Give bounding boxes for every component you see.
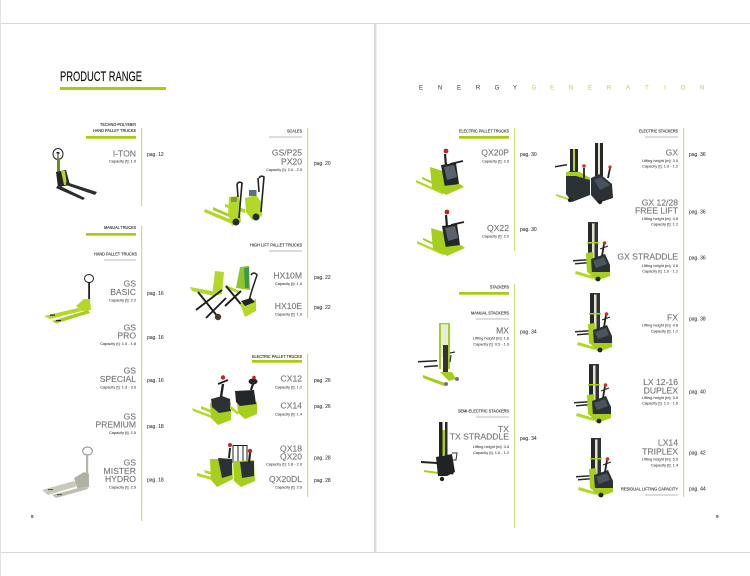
- page number 8: 8: [31, 514, 34, 519]
- icon: QX22 truck: [417, 210, 465, 256]
- product: FX: pag. 38: [689, 317, 706, 323]
- icon: FX stacker: [575, 293, 612, 352]
- product: QX18 QX20: Capacity [t]: 1.8 - 2.0: [266, 462, 303, 467]
- icon: QX pallet trucks: [197, 443, 255, 487]
- product: MX: [473, 325, 537, 346]
- product: CX12: [275, 374, 331, 390]
- product: LX14 triplex: TRIPLEX: [642, 446, 678, 456]
- right page: [416, 85, 719, 528]
- product: CX14: Capacity [t]: 1.4: [275, 411, 303, 416]
- section: residual lifting capacity: RESIDUAL LIFTING CAPACITY: [621, 487, 679, 492]
- section: residual lifting capacity: [621, 487, 706, 496]
- subheading: hand pallet trucks: HAND PALLET TRUCKS: [94, 252, 137, 257]
- subheading: manual stackers: MANUAL STACKERS: [471, 310, 509, 315]
- product: GX: Capacity [t]: 1.0 - 1.2: [642, 164, 678, 169]
- product: LX14 triplex: pag. 42: [689, 451, 706, 457]
- subheading: semi-electric stackers: SEMI-ELECTRIC STACKERS: [458, 409, 509, 414]
- icon: CX pallet trucks: [192, 375, 258, 425]
- icon: TX stacker: [421, 422, 457, 481]
- product: TX / TX straddle: Capacity [t]: 1.0 - 1.2: [473, 450, 509, 455]
- icon: I-TON pallet truck: [53, 148, 97, 200]
- section: electric pallet trucks: ELECTRIC PALLET TRUCKS: [252, 354, 302, 359]
- product: GX straddle: Capacity [t]: 1.0 - 1.2: [642, 269, 678, 274]
- product: LX 12-16 duplex: pag. 40: [689, 389, 706, 395]
- product: GS mister hydro: HYDRO: [105, 474, 136, 484]
- product: GS mister hydro: GS: [124, 458, 136, 468]
- heading: energy generation: [419, 85, 704, 91]
- section: techno-polymer hand pallet trucks: [86, 122, 164, 206]
- product: GS basic: pag. 16: [147, 291, 164, 297]
- heading: energy generation: ENERGY: [419, 85, 517, 91]
- product: GS special: pag. 16: [147, 378, 164, 384]
- section: scales: Capacity [t]: 2.0 - 2.5: [266, 167, 302, 172]
- section: techno-polymer hand pallet trucks: pag. 12: [147, 152, 164, 158]
- section: high lift pallet trucks: HIGH LIFT PALLET TRUCKS: [250, 243, 302, 248]
- product: QX20DL: Capacity [t]: 2.0: [275, 485, 303, 490]
- product: GS mister hydro: Capacity [t]: 2.5: [109, 484, 136, 489]
- product: FX: Capacity [t]: 1.2: [651, 328, 678, 333]
- product: GS mister hydro: pag. 18: [147, 478, 164, 484]
- product: GX: Lifting height [m]: 3.5: [642, 158, 678, 163]
- product: HX10E: Capacity [t]: 1.0: [275, 312, 303, 317]
- product: GS mister hydro: MISTER: [104, 466, 136, 476]
- section: techno-polymer hand pallet trucks: Capacity [t]: 1.0: [109, 158, 137, 164]
- product: GX 12/28 free lift: GX 12/28: [642, 197, 678, 207]
- product: GS special: SPECIAL: [100, 374, 136, 384]
- product: GS special: GS: [124, 366, 136, 376]
- product: GS pro: PRO: [117, 331, 136, 341]
- section: high lift pallet trucks: [250, 243, 302, 252]
- product: TX / TX straddle: TX STRADDLE: [450, 432, 509, 442]
- product: QX20DL: [269, 474, 331, 490]
- icon: GX straddle stacker: [573, 222, 610, 281]
- product: GS premium: GS: [124, 411, 136, 421]
- product: CX12: pag. 26: [314, 378, 331, 384]
- product: HX10M: HX10M: [273, 271, 302, 281]
- product: QX18 QX20: QX20: [280, 451, 302, 461]
- icon: scale pallet trucks: [204, 176, 264, 226]
- product: QX20P: Capacity [t]: 2.0: [482, 158, 510, 163]
- product: GS special: [100, 366, 164, 389]
- product: TX / TX straddle: Lifting height [m]: 3.5: [473, 444, 509, 449]
- product: LX14 triplex: Lifting height [m]: 5.0: [642, 457, 679, 462]
- product: CX14: CX14: [280, 401, 302, 411]
- product: QX20P: QX20P: [481, 148, 509, 158]
- heading: energy generation: GENERATION: [532, 85, 704, 91]
- icon: QX20P truck: [416, 149, 464, 195]
- product: GX 12/28 free lift: [635, 197, 706, 227]
- product: LX 12-16 duplex: Lifting height [m]: 3.5: [642, 395, 678, 400]
- product: GX straddle: Lifting height [m]: 3.8: [642, 263, 678, 268]
- product: QX18 QX20: QX18: [280, 443, 302, 453]
- product: CX12: Capacity [t]: 1.2: [275, 385, 302, 390]
- product: HX10M: [273, 271, 331, 286]
- product: GS basic: [109, 279, 164, 303]
- product: GX straddle: GX STRADDLE: [617, 251, 678, 261]
- product: QX20P: [481, 148, 537, 163]
- section: scales: SCALES: [287, 128, 302, 133]
- product: LX 12-16 duplex: [642, 377, 706, 406]
- section: techno-polymer hand pallet trucks: HAND PALLET TRUCKS: [93, 128, 136, 133]
- product: FX: FX: [667, 312, 678, 322]
- product: HX10E: [275, 301, 331, 317]
- product: GX 12/28 free lift: Capacity [t]: 1.2: [651, 222, 678, 227]
- subheading: manual stackers: [471, 310, 509, 320]
- product: GX 12/28 free lift: pag. 36: [689, 210, 706, 216]
- product: MX: pag. 34: [520, 330, 537, 336]
- product: GX straddle: pag. 36: [689, 256, 706, 262]
- product: GS premium: PREMIUM: [95, 420, 136, 430]
- section: scales: [266, 128, 331, 318]
- product: CX14: [275, 401, 331, 416]
- product: TX / TX straddle: pag. 34: [520, 436, 537, 442]
- section: techno-polymer hand pallet trucks: TECHNO-POLYMER: [100, 122, 136, 127]
- product: MX: Capacity [t]: 0.5 - 1.0: [473, 341, 510, 346]
- section: scales: pag. 20: [314, 161, 331, 167]
- product: LX14 triplex: Capacity [t]: 1.4: [651, 462, 679, 467]
- section: electric pallet trucks: ELECTRIC PALLET TRUCKS: [459, 128, 509, 133]
- product: LX 12-16 duplex: DUPLEX: [644, 385, 678, 395]
- icon: GS basic pallet truck: [44, 274, 94, 324]
- product: QX22: Capacity [t]: 2.2: [482, 233, 509, 238]
- product: FX: [642, 312, 706, 333]
- product: MX: MX: [496, 325, 509, 335]
- product: QX20DL: pag. 28: [314, 478, 331, 484]
- icon: high lift trucks: [190, 266, 257, 320]
- product: GS premium: [95, 411, 164, 435]
- product: CX12: CX12: [280, 374, 302, 384]
- product: LX14 triplex: [642, 438, 706, 467]
- product: QX18 QX20: pag. 28: [314, 456, 331, 462]
- product: TX / TX straddle: TX: [498, 424, 509, 434]
- product: QX20DL: QX20DL: [269, 474, 302, 484]
- icon: LX 12-16 duplex stacker: [574, 364, 611, 423]
- icon: LX14 triplex stacker: [576, 438, 613, 497]
- section: electric stackers: ELECTRIC STACKERS: [639, 128, 678, 133]
- product: HX10M: Capacity [t]: 1.0: [275, 281, 303, 286]
- product: GS pro: GS: [124, 323, 136, 333]
- product: LX14 triplex: LX14: [658, 438, 678, 448]
- subheading: semi-electric stackers: [458, 409, 509, 418]
- product: LX 12-16 duplex: Capacity [t]: 1.2 - 1.6: [642, 401, 678, 406]
- subheading: hand pallet trucks: [94, 252, 137, 261]
- product: QX22: QX22: [487, 223, 509, 233]
- icon: GX stackers: [555, 143, 613, 204]
- product: GS premium: pag. 18: [147, 424, 164, 430]
- product: GS pro: [100, 323, 164, 346]
- section: scales: PX20: [281, 157, 302, 167]
- section: stackers: STACKERS: [490, 285, 509, 290]
- section: residual lifting capacity: pag. 44: [689, 487, 706, 493]
- product: QX22: pag. 30: [520, 227, 537, 233]
- product: GX: GX: [666, 148, 678, 158]
- product: QX18 QX20: [266, 443, 331, 467]
- product: GS basic: Capacity [t]: 2.2: [109, 298, 136, 303]
- left page: [31, 68, 331, 521]
- section: scales: GS/P25: [272, 148, 302, 158]
- title: product range: [60, 68, 166, 90]
- product: QX20P: pag. 30: [520, 152, 537, 158]
- product: GX 12/28 free lift: FREE LIFT: [635, 206, 679, 216]
- product: LX 12-16 duplex: LX 12-16: [643, 377, 678, 387]
- product: GS premium: Capacity [t]: 2.5: [109, 430, 136, 435]
- product: HX10E: pag. 22: [314, 305, 331, 311]
- section heading: manual trucks: MANUAL TRUCKS: [104, 225, 136, 230]
- product: CX14: pag. 26: [314, 404, 331, 410]
- product: HX10M: pag. 22: [314, 275, 331, 281]
- product: GS basic: GS: [124, 279, 136, 289]
- product: MX: Lifting height [m]: 1.6: [473, 336, 509, 341]
- product: GS mister hydro: [104, 458, 164, 489]
- product: GS special: Capacity [t]: 1.3 - 3.0: [100, 384, 137, 389]
- product: GX: pag. 36: [689, 152, 706, 158]
- product: HX10E: HX10E: [275, 301, 302, 311]
- product: QX22: [482, 223, 537, 238]
- title: product range: PRODUCT RANGE: [60, 68, 142, 84]
- product: GX 12/28 free lift: Lifting height [m]: 4.8: [642, 216, 678, 221]
- page number 9: 9: [716, 514, 719, 519]
- section: electric pallet trucks: [459, 128, 515, 251]
- product: TX / TX straddle: [450, 424, 537, 455]
- section: techno-polymer hand pallet trucks: I-TON: [113, 149, 136, 159]
- product: FX: Lifting height [m]: 4.8: [642, 323, 678, 328]
- product: GX: [642, 148, 706, 169]
- product: GX straddle: [617, 251, 706, 274]
- product: GS basic: BASIC: [110, 287, 136, 297]
- icon: MX manual stacker: [418, 323, 459, 386]
- product: GS pro: Capacity [t]: 1.5 - 1.8: [100, 341, 136, 346]
- product: GS pro: pag. 16: [147, 335, 164, 341]
- icon: GS mister hydro pallet truck: [42, 447, 92, 498]
